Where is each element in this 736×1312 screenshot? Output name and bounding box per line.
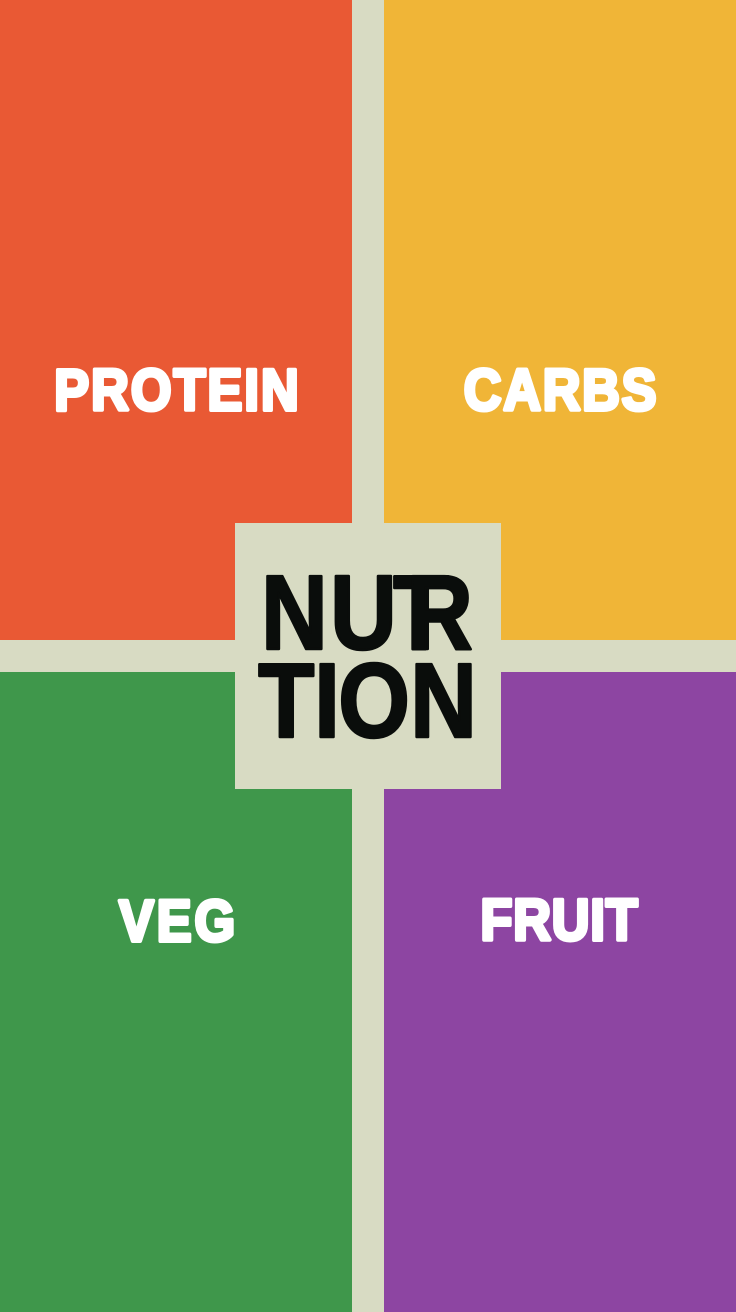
panel: fruit xyxy=(384,672,736,1312)
label: protein: PROTEIN xyxy=(54,357,301,423)
label: fruit: FRUIT xyxy=(480,887,639,953)
label: veg: VEG xyxy=(119,888,238,954)
panel: carbs xyxy=(384,0,736,640)
panel: protein xyxy=(0,0,352,640)
center box xyxy=(235,523,501,789)
panel: veg xyxy=(0,672,352,1312)
title: nutrition: TION xyxy=(258,642,477,760)
title: nutrition xyxy=(258,554,477,760)
title: nutrition: NUTR xyxy=(261,554,473,672)
label: carbs: CARBS xyxy=(464,357,658,423)
